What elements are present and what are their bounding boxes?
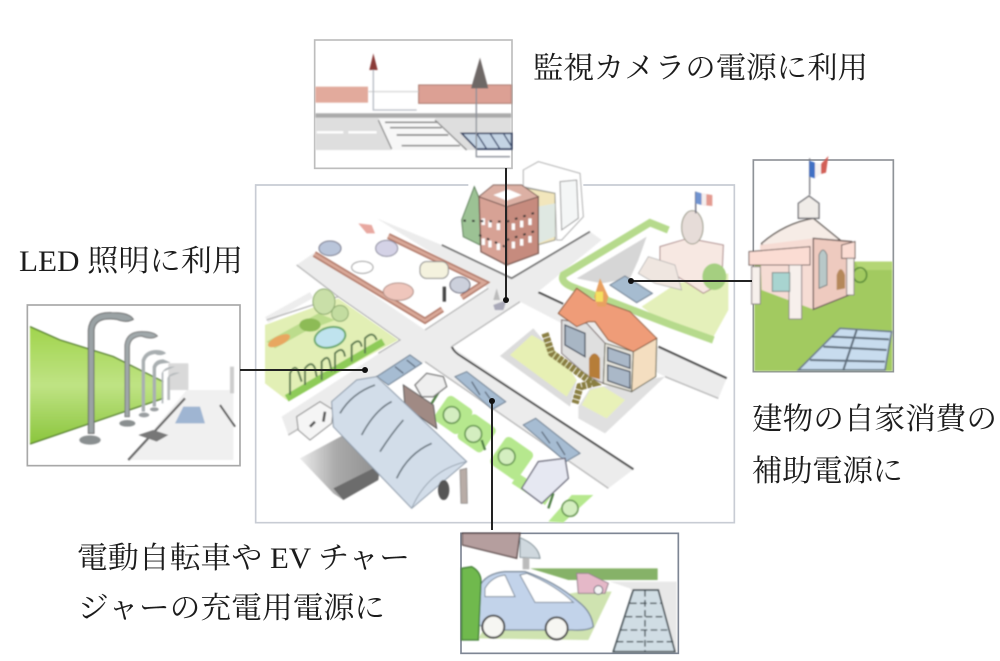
leader: EV charging <box>489 398 495 530</box>
carport and charging strip <box>297 373 593 523</box>
leader: building power <box>628 278 752 284</box>
church scene <box>749 156 892 371</box>
solar pavement <box>462 133 512 149</box>
label: charging power: ジャーの充電用電源に <box>78 592 385 625</box>
street light scene <box>30 313 235 460</box>
inset frame <box>753 160 893 372</box>
inset: church with solar panels <box>749 156 893 372</box>
solar road strips <box>377 355 580 462</box>
solar pavement <box>798 328 892 370</box>
leader: surveillance camera <box>503 168 509 303</box>
office buildings <box>462 162 583 265</box>
panel: city overview illustration <box>256 162 734 523</box>
label: surveillance camera power: 監視カメラの電源に利用 <box>533 52 868 85</box>
inset frame <box>315 40 512 168</box>
label: building self-consumption: 建物の自家消費の <box>752 403 997 436</box>
inset frame <box>27 305 240 466</box>
flag <box>809 161 815 178</box>
house <box>500 278 665 433</box>
inset: EV charging <box>461 533 678 653</box>
label: LED lighting: LED 照明に利用 <box>19 245 243 278</box>
leader lines <box>240 168 752 530</box>
inset: LED street lights <box>27 305 240 466</box>
church site <box>563 192 728 340</box>
street network <box>267 218 727 488</box>
electric car <box>478 572 593 630</box>
EV charger scene <box>462 533 677 652</box>
label: auxiliary power: 補助電源に <box>752 455 903 488</box>
parking lot details <box>314 223 507 321</box>
solar panels at church <box>610 276 652 303</box>
label: e-bike and EV charger: 電動自転車や EV チャー <box>77 542 410 575</box>
park <box>265 289 398 400</box>
panel frame <box>256 185 734 523</box>
leader: LED lighting <box>240 367 368 373</box>
inset frame <box>461 533 678 653</box>
inset: surveillance camera crosswalk <box>315 40 512 168</box>
solar pavement <box>613 590 675 652</box>
crosswalk scene <box>315 53 512 157</box>
